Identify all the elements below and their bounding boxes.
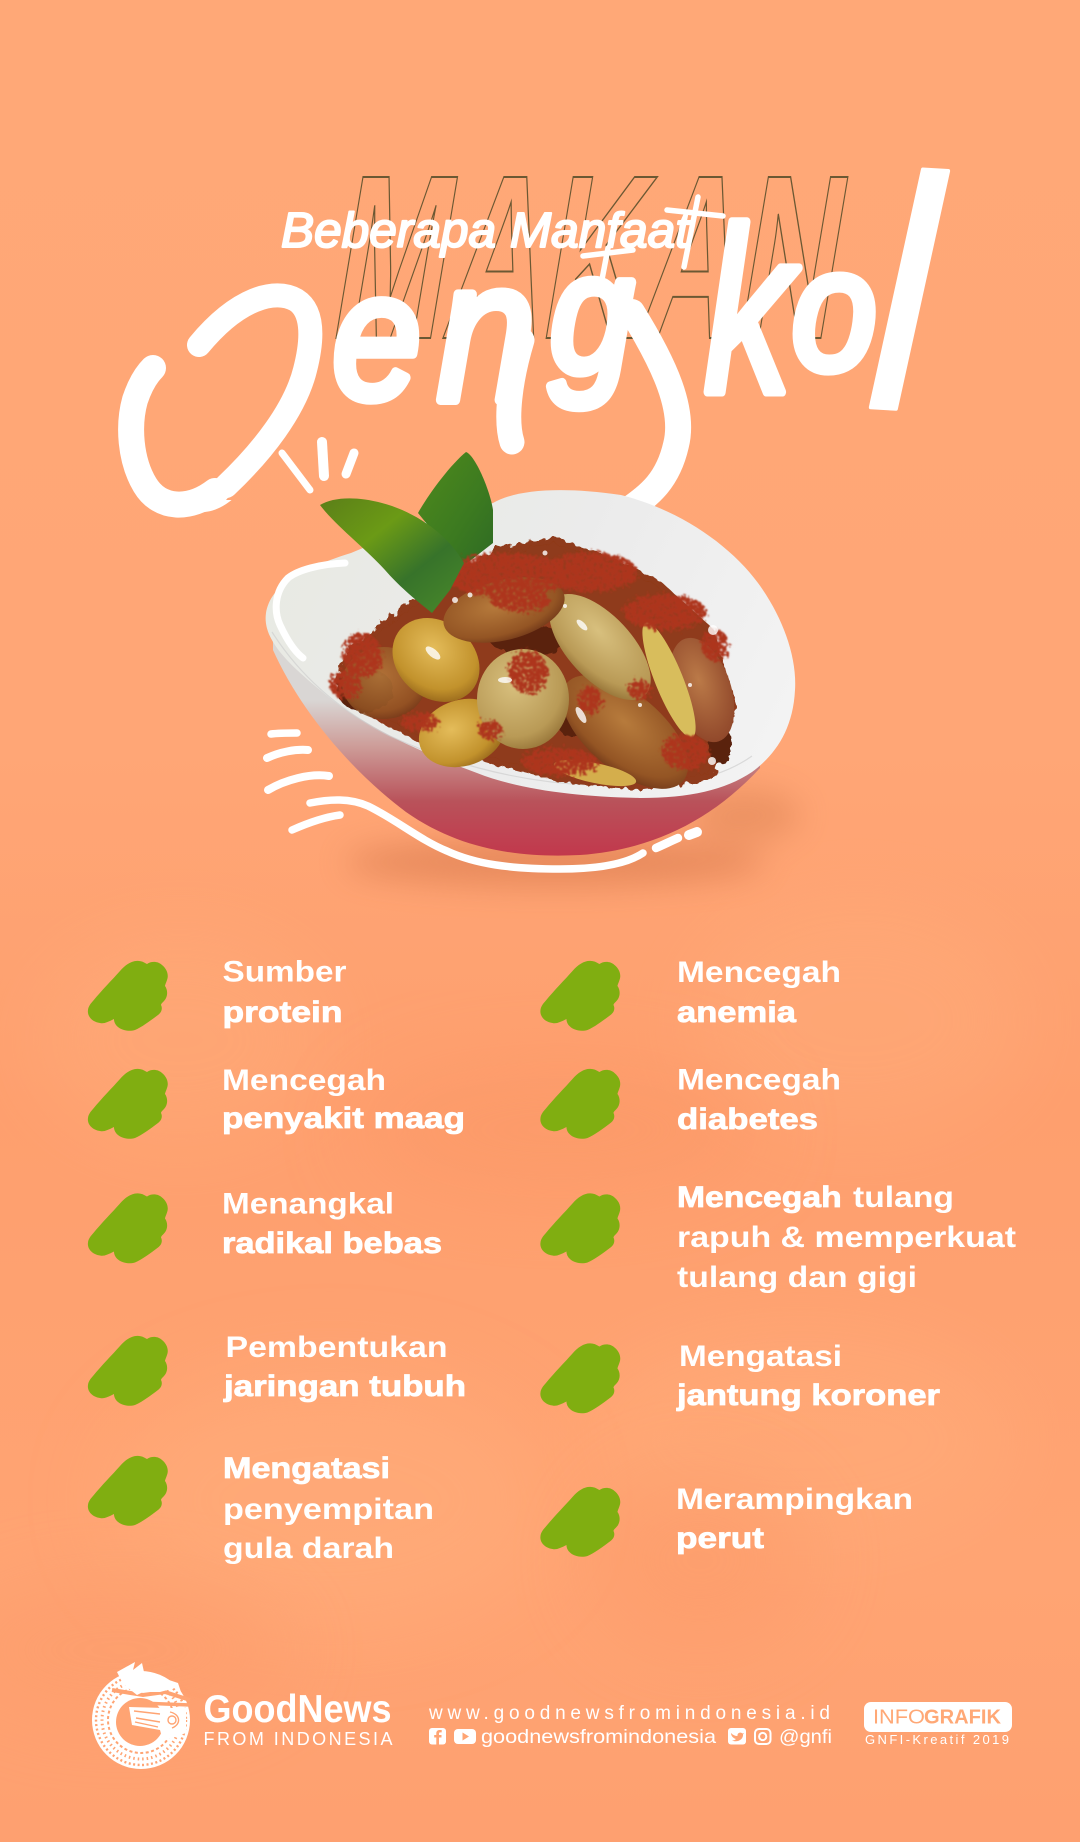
item: Mencegah penyakit maag — [88, 1064, 465, 1139]
title: Beberapa Manfaat: Beberapa Manfaat — [281, 204, 691, 258]
brand name: FROM INDONESIA — [204, 1729, 392, 1749]
icon: instagram — [755, 1729, 770, 1744]
item: Mencegah tulang rapuh: Mencegah — [677, 1181, 851, 1214]
decorative swirl under the bowl — [267, 733, 697, 869]
item: Sumber protein: protein — [222, 996, 342, 1029]
badge: infografik: INFO — [873, 1706, 925, 1728]
item: Pembentukan jaringan tubuh — [88, 1331, 466, 1406]
item: Menangkal radikal bebas: radikal bebas — [222, 1227, 442, 1260]
logo: garuda emblem — [92, 1662, 190, 1769]
item: Mencegah anemia: anemia — [677, 996, 796, 1029]
food: highlights — [424, 550, 718, 765]
item: Mencegah diabetes — [540, 1064, 841, 1139]
item: Mencegah tulang rapuh — [540, 1181, 1016, 1294]
icon: facebook — [429, 1728, 446, 1744]
title: Jengkol: n — [437, 218, 535, 442]
item: Mencegah tulang rapuh: tulang dan gigi — [677, 1261, 917, 1294]
leaf: front — [320, 498, 464, 613]
social row — [429, 1726, 832, 1748]
item: Merampingkan perut: Merampingkan — [676, 1483, 913, 1516]
illustration: bowl of jengkol — [266, 452, 800, 886]
item: Merampingkan perut — [540, 1483, 913, 1557]
item: Merampingkan perut: perut — [676, 1522, 764, 1555]
item: Mencegah tulang rapuh: tulang — [853, 1181, 954, 1214]
icon: youtube — [454, 1729, 476, 1744]
item: Mengatasi jantung koroner: Mengatasi — [679, 1340, 842, 1373]
item: Mencegah tulang rapuh: rapuh & memperkuat — [677, 1221, 1016, 1254]
social row: @gnfi — [779, 1726, 832, 1748]
food base — [338, 540, 734, 787]
badge: infografik — [864, 1702, 1012, 1747]
item: Mengatasi penyempitan gula darah: gula darah — [223, 1532, 394, 1565]
website: www.goodnewsfromindonesia.id — [428, 1703, 830, 1724]
brand name — [204, 1688, 392, 1749]
brand name: GoodNews — [204, 1688, 392, 1731]
item: Mencegah anemia — [540, 956, 841, 1031]
item: Mencegah anemia: Mencegah — [677, 956, 841, 989]
bowl interior — [266, 490, 795, 798]
item: Mengatasi jantung koroner: jantung koroner — [676, 1379, 940, 1412]
item: Sumber protein: Sumber — [222, 956, 347, 988]
food: dark gaps — [337, 626, 732, 763]
bowl rim — [272, 632, 752, 786]
title: Jengkol — [118, 168, 950, 518]
benefits list — [88, 956, 1016, 1565]
icon: accent ticks — [282, 442, 354, 490]
title: Jengkol: k — [704, 180, 799, 442]
badge: infografik: GRAFIK — [924, 1706, 1002, 1728]
item: Mencegah penyakit maag: Mencegah — [222, 1064, 386, 1097]
item: Mencegah diabetes: diabetes — [677, 1103, 818, 1136]
item: Mengatasi penyempitan gula darah: Mengatasi — [223, 1452, 390, 1485]
food: beans — [342, 566, 746, 810]
icon: twitter — [728, 1728, 746, 1744]
title: Jengkol: e — [333, 236, 421, 436]
social row: goodnewsfromindonesia — [481, 1726, 716, 1748]
item: Mencegah diabetes: Mencegah — [677, 1064, 841, 1096]
bowl shadow — [345, 789, 800, 886]
item: Mengatasi penyempitan gula darah: penyempitan — [223, 1493, 434, 1526]
item: Pembentukan jaringan tubuh: Pembentukan — [226, 1331, 448, 1364]
leaf: back — [418, 452, 493, 567]
title: Beberapa Manfaat — [281, 197, 723, 290]
title: Jengkol: J — [113, 286, 349, 588]
item: Mengatasi jantung koroner — [540, 1340, 940, 1413]
food: sambal — [329, 552, 729, 776]
bowl body — [273, 630, 760, 856]
rim highlight stroke — [276, 563, 345, 658]
title: Jengkol: l — [863, 108, 953, 482]
item: Sumber protein — [88, 956, 347, 1031]
title: Jengkol: g — [550, 218, 633, 408]
badge: infografik: GNFI-Kreatif 2019 — [865, 1732, 1009, 1747]
item: Menangkal radikal bebas — [88, 1188, 442, 1263]
item: Mencegah penyakit maag: penyakit maag — [222, 1102, 465, 1135]
item: Mengatasi penyempitan gula darah — [88, 1452, 434, 1565]
title: Jengkol: o — [792, 214, 876, 406]
item: Pembentukan jaringan tubuh: jaringan tubuh — [223, 1370, 466, 1403]
item: Menangkal radikal bebas: Menangkal — [222, 1188, 394, 1220]
footer — [92, 1662, 1012, 1769]
